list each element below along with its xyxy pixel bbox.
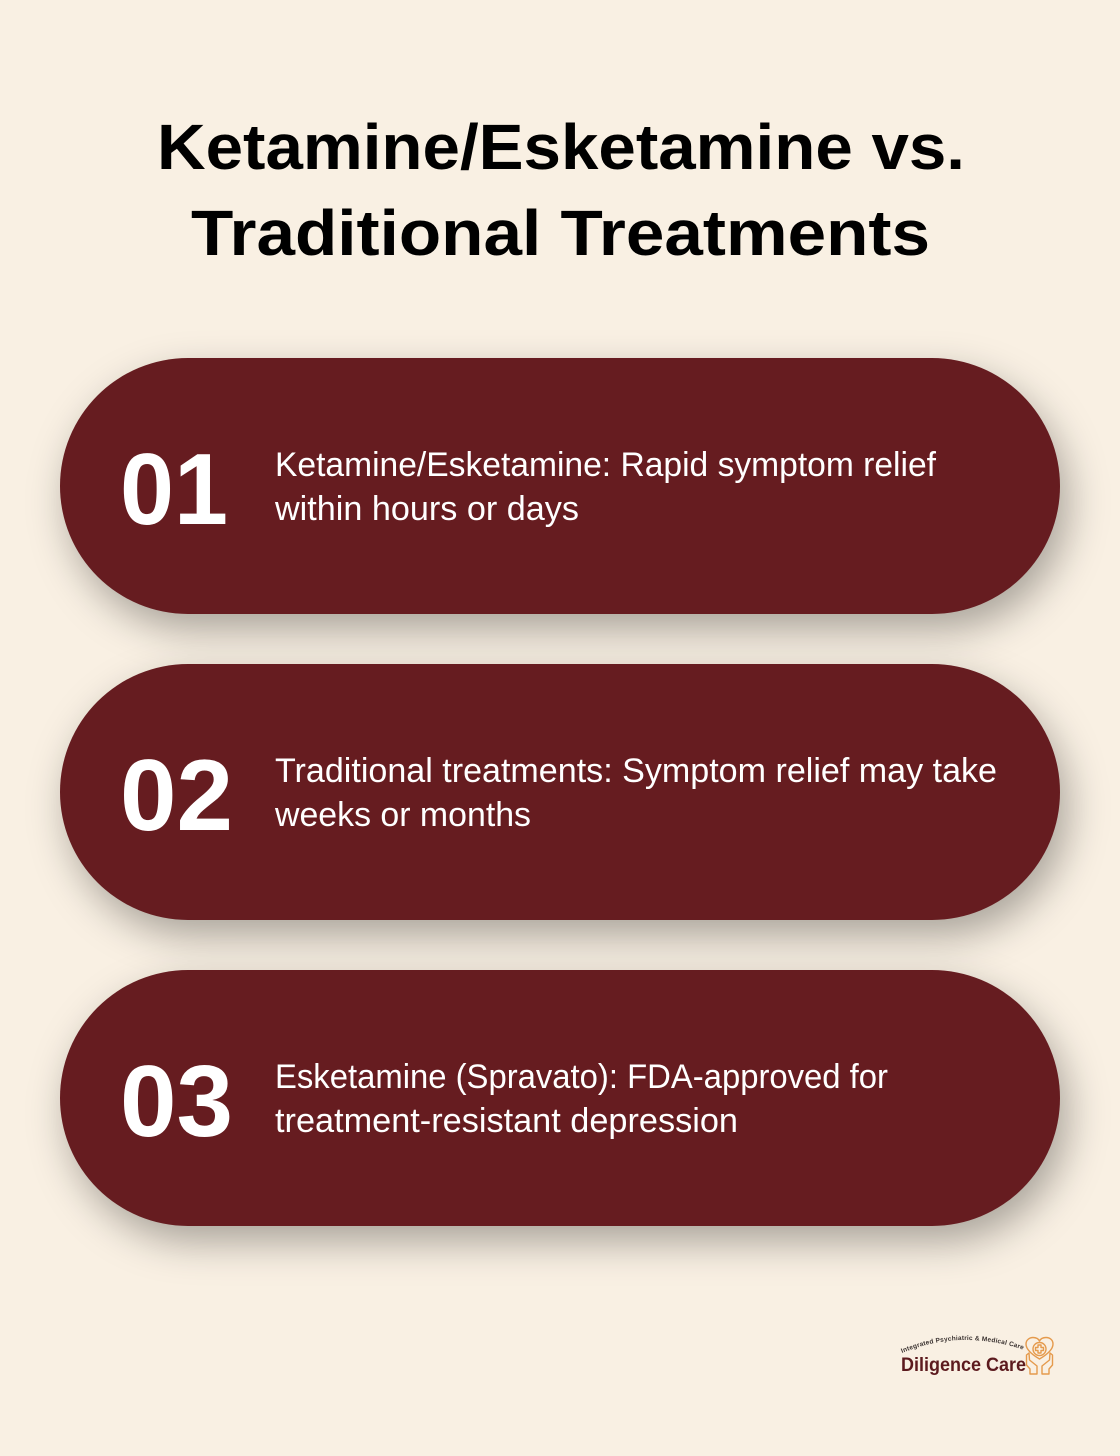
number 01: 01 — [120, 434, 228, 546]
title — [157, 111, 965, 269]
logo: Diligence Care — [900, 1335, 1054, 1376]
text: item 3: Esketamine (Spravato): FDA-approved for — [275, 1058, 888, 1096]
panel: traditional treatments slow relief — [60, 664, 1068, 936]
text: item 1: within hours or days — [274, 490, 579, 528]
text: item 3 — [275, 1058, 888, 1140]
text: item 1: Ketamine/Esketamine: Rapid symptom relief — [275, 446, 937, 484]
text: item 2: Traditional treatments: Symptom relief may take — [275, 752, 997, 790]
panel: esketamine FDA approval — [60, 970, 1068, 1242]
number 02: 02 — [120, 740, 233, 852]
icon: heart with cross and caring hands — [1026, 1338, 1053, 1374]
text: item 2: weeks or months — [274, 796, 531, 834]
panel: ketamine/esketamine rapid relief — [60, 358, 1068, 630]
title: Traditional Treatments — [191, 197, 930, 269]
number 03: 03 — [120, 1046, 233, 1158]
text: item 2 — [274, 752, 997, 834]
logo tagline: Integrated Psychiatric & Medical Care — [900, 1335, 1024, 1353]
title: Ketamine/Esketamine vs. — [157, 111, 965, 183]
logo wordmark: Diligence Care — [901, 1355, 1026, 1376]
text: item 3: treatment-resistant depression — [275, 1102, 738, 1140]
text: item 1 — [274, 446, 937, 528]
